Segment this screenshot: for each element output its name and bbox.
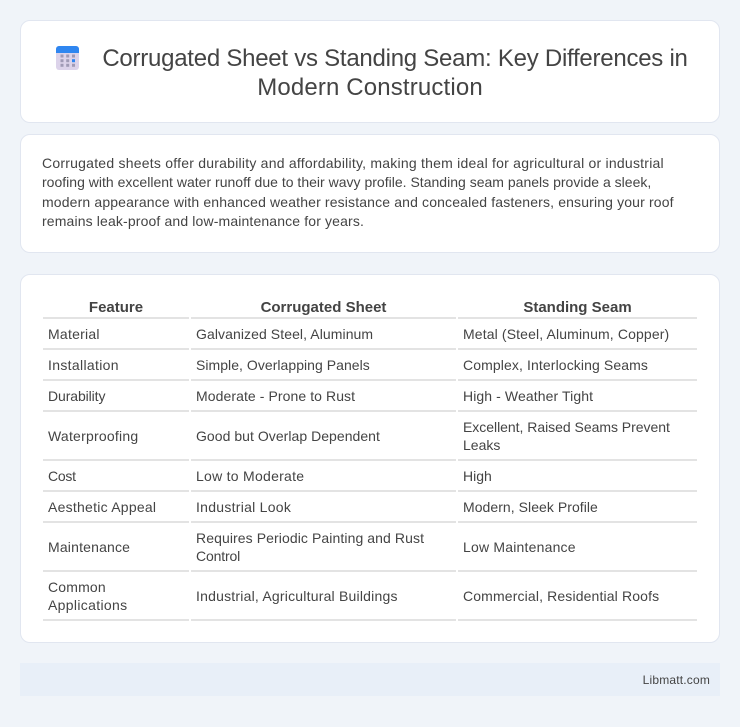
row: Cost: Low to Moderate (196, 468, 304, 484)
row: Common Applications: Commercial, Residential Roofs (463, 588, 659, 604)
row: Common Applications: Applications (48, 597, 127, 613)
icon: calendar grid (56, 46, 79, 70)
row: Durability: Durability (48, 388, 105, 404)
row: Installation: Complex, Interlocking Seams (463, 357, 648, 373)
row: Aesthetic Appeal: Aesthetic Appeal (48, 499, 156, 515)
footer bar (20, 663, 720, 696)
row: Maintenance: Low Maintenance (463, 539, 576, 555)
row: Maintenance: Control (196, 548, 240, 564)
row: Installation: Simple, Overlapping Panels (196, 357, 370, 373)
row: Installation: Installation (48, 357, 119, 373)
title (102, 45, 688, 101)
title: Corrugated Sheet vs Standing Seam: Key Differences in (102, 45, 688, 72)
row: Maintenance (43, 530, 697, 572)
row: column headings: Corrugated Sheet (261, 299, 386, 316)
row: column headings: Standing Seam (523, 299, 632, 316)
row: Cost: Cost (48, 468, 76, 484)
row: Cost: High (463, 468, 492, 484)
intro text: remains leak-proof and low-maintenance for years. (42, 213, 364, 229)
row: Durability (43, 388, 697, 412)
row: Material: Galvanized Steel, Aluminum (196, 326, 373, 342)
panel: comparison table card (20, 274, 720, 643)
intro text: Corrugated sheets offer durability and affordability, making them ideal for agricultural or industrial (42, 155, 664, 171)
row: Waterproofing: Leaks (463, 437, 500, 453)
intro text (42, 155, 674, 229)
row: Material: Metal (Steel, Aluminum, Copper) (463, 326, 669, 342)
row: Waterproofing (43, 419, 697, 461)
row: Maintenance: Requires Periodic Painting and Rust (196, 530, 424, 546)
row: Maintenance: Maintenance (48, 539, 130, 555)
row: Common Applications: Common (48, 579, 106, 595)
title: Modern Construction (257, 74, 483, 101)
row: Waterproofing: Waterproofing (48, 428, 138, 444)
panel: intro card (20, 134, 720, 253)
row: Waterproofing: Excellent, Raised Seams Prevent (463, 419, 670, 435)
row: Waterproofing: Good but Overlap Dependent (196, 428, 380, 444)
row: Durability: Moderate - Prone to Rust (196, 388, 355, 404)
row: Cost (43, 468, 697, 492)
footer text: Libmatt.com (643, 673, 710, 687)
row: column headings: Feature (89, 299, 143, 316)
panel: title card (20, 20, 720, 123)
row: Material: Material (48, 326, 100, 342)
intro text: roofing with excellent water runoff due to their wavy profile. Standing seam panels provide a sleek, (42, 174, 651, 190)
row: column headings (43, 299, 697, 319)
row: Material (43, 326, 697, 350)
row: Aesthetic Appeal (43, 499, 697, 523)
row: Installation (43, 357, 697, 381)
row: Aesthetic Appeal: Modern, Sleek Profile (463, 499, 598, 515)
row: Common Applications (43, 579, 697, 621)
row: Durability: High - Weather Tight (463, 388, 593, 404)
intro text: modern appearance with enhanced weather resistance and concealed fasteners, ensuring your roof (42, 194, 674, 210)
row: Common Applications: Industrial, Agricultural Buildings (196, 588, 398, 604)
table: comparison of features (43, 299, 697, 621)
row: Aesthetic Appeal: Industrial Look (196, 499, 291, 515)
